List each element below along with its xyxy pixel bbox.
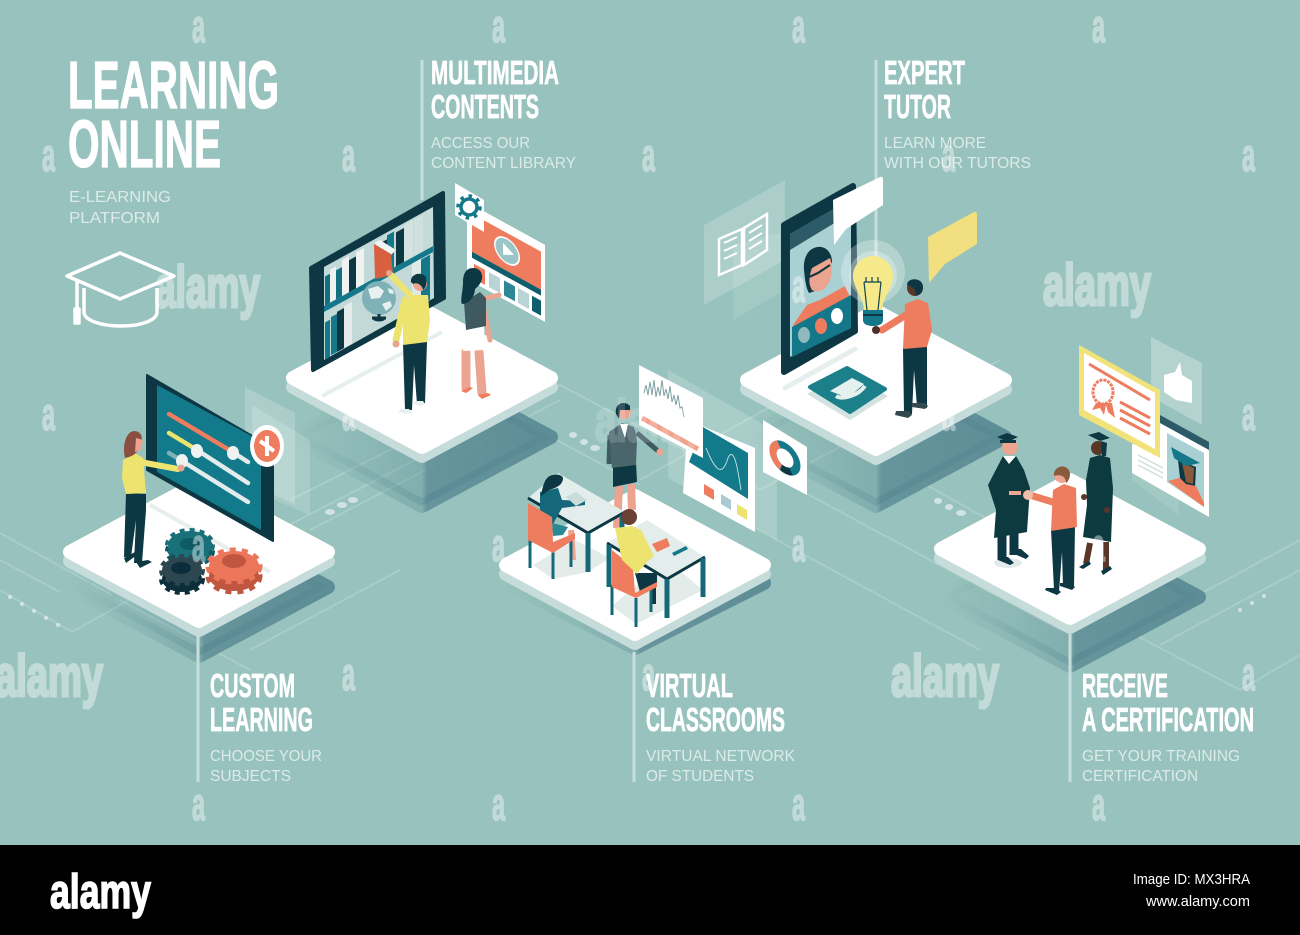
- heading: multimedia contents: CONTENTS: [431, 88, 539, 125]
- heading: virtual classrooms: [646, 667, 785, 738]
- watermark: repeated small letters: a: [942, 129, 955, 181]
- tutor button with cap: [807, 368, 888, 420]
- watermark: repeated small letters: a: [192, 0, 205, 52]
- watermark: repeated small letters: a: [342, 388, 355, 440]
- vertical connector lines: [198, 60, 1070, 782]
- watermark: faint central wordmark: alamy: [595, 389, 703, 454]
- certificate: [1079, 345, 1160, 458]
- chart card with teal graph: [683, 420, 755, 532]
- watermark: repeated small letters: a: [192, 519, 205, 571]
- text: access our content library: ACCESS OUR: [431, 135, 530, 152]
- text: get your training certification: [1082, 748, 1240, 785]
- footer bar: [0, 845, 1300, 935]
- plus badge: [250, 425, 284, 467]
- panel: receive a certification: [941, 337, 1254, 785]
- subtitle: [69, 189, 171, 227]
- text: learn more with our tutors: WITH OUR TUTORS: [884, 155, 1031, 172]
- text: choose your subjects: CHOOSE YOUR: [210, 748, 322, 765]
- woman at monitor: [122, 431, 184, 568]
- text: choose your subjects: SUBJECTS: [210, 768, 291, 785]
- white speech bubble: [833, 177, 883, 245]
- watermark: repeated small letters: a: [642, 129, 655, 181]
- text: learn more with our tutors: [884, 135, 1031, 172]
- watermark: repeated small letters: a: [792, 519, 805, 571]
- text: virtual network of students: VIRTUAL NETWORK: [646, 748, 795, 765]
- icon: graduation cap: [67, 253, 174, 326]
- watermark: alamy wordmarks: alamy: [1043, 253, 1151, 318]
- heading: custom learning: LEARNING: [210, 701, 313, 738]
- watermark: repeated small letters: a: [642, 648, 655, 700]
- desk one with student: [528, 473, 625, 579]
- heading: receive a certification: [1082, 667, 1254, 738]
- circuit background lines: [0, 345, 1300, 690]
- platform: [70, 483, 328, 630]
- donut card: [763, 420, 807, 495]
- profile card: [1132, 415, 1209, 517]
- alamy logo: alamy: [50, 866, 151, 919]
- heading: multimedia contents: MULTIMEDIA: [431, 54, 559, 91]
- watermark: alamy wordmarks: alamy: [155, 255, 260, 320]
- watermark: repeated small letters: a: [942, 388, 955, 440]
- panel: custom learning: [70, 375, 328, 785]
- settings monitor: [147, 375, 273, 541]
- man in yellow sweater: [386, 270, 430, 414]
- heading: expert tutor: TUTOR: [884, 88, 951, 125]
- woman in grey top: [461, 268, 499, 399]
- watermark: repeated small letters: a: [192, 778, 205, 830]
- red book: [374, 240, 396, 279]
- website: www.alamy.com: [1145, 894, 1250, 910]
- watermark: repeated small letters: a: [792, 0, 805, 52]
- watermark: repeated small letters: a: [492, 778, 505, 830]
- translucent rectangle: [1132, 440, 1180, 515]
- translucent card: [668, 370, 777, 540]
- text: get your training certification: GET YOUR TRAINING: [1082, 748, 1240, 765]
- thumbs up card: [1151, 337, 1202, 425]
- text: learn more with our tutors: LEARN MORE: [884, 135, 986, 152]
- platform: [747, 311, 1005, 458]
- text: access our content library: CONTENT LIBRARY: [431, 155, 576, 172]
- translucent cards and book icon: [704, 180, 785, 320]
- heading: custom learning: CUSTOM: [210, 667, 295, 704]
- graduate man: [988, 433, 1030, 568]
- text: get your training certification: CERTIFICATION: [1082, 768, 1198, 785]
- desk two with student: [607, 509, 705, 627]
- line chart card: [639, 365, 703, 458]
- platform: [506, 496, 764, 643]
- text: virtual network of students: [646, 748, 795, 785]
- icon: globe: [362, 281, 396, 322]
- tutor man in coral sweater: [872, 279, 932, 418]
- heading: custom learning: [210, 667, 313, 738]
- watermark: alamy wordmarks: alamy: [891, 644, 999, 709]
- watermark: repeated small letters: a: [1242, 648, 1255, 700]
- watermark: repeated small letters: a: [792, 260, 805, 312]
- text: choose your subjects: [210, 748, 322, 785]
- panel: expert tutor: [704, 54, 1031, 458]
- watermark: repeated small letters: a: [342, 648, 355, 700]
- platform: [293, 309, 551, 456]
- circuit dots: [8, 432, 1266, 627]
- watermark: repeated small letters: a: [492, 0, 505, 52]
- watermark: repeated small letters: a: [1092, 519, 1105, 571]
- watermark: repeated small letters: a: [792, 778, 805, 830]
- subtitle: E-LEARNING: [69, 189, 171, 206]
- phone with video call: [784, 186, 855, 372]
- platform: [941, 480, 1199, 627]
- title: LEARNING: [68, 48, 279, 123]
- heading: receive a certification: RECEIVE: [1082, 667, 1168, 704]
- watermark: repeated small letters: a: [42, 388, 55, 440]
- watermark: alamy wordmarks: [0, 253, 1151, 709]
- image id: Image ID: MX3HRA: [1133, 872, 1250, 888]
- watermark: repeated small letters: a: [492, 519, 505, 571]
- icon: gear card: [455, 183, 484, 232]
- translucent cards: [245, 387, 310, 515]
- text: access our content library: [431, 135, 576, 172]
- watermark: repeated small letters: a: [42, 129, 55, 181]
- heading: virtual classrooms: VIRTUAL: [646, 667, 733, 704]
- panel: multimedia contents: [293, 54, 576, 456]
- tablet bookshelf: [311, 193, 444, 370]
- gears: [161, 530, 260, 593]
- heading: virtual classrooms: CLASSROOMS: [646, 701, 785, 738]
- man in coral sweater: [1023, 467, 1077, 595]
- title: [68, 48, 279, 182]
- icon: light bulb: [841, 240, 905, 326]
- title: ONLINE: [68, 107, 221, 182]
- watermark: repeated small letters: a: [1092, 0, 1105, 52]
- subtitle: PLATFORM: [69, 210, 160, 227]
- text: virtual network of students: OF STUDENTS: [646, 768, 754, 785]
- watermark: repeated small letters: a: [1242, 388, 1255, 440]
- watermark: repeated small letters: a: [342, 129, 355, 181]
- watermark: repeated small letters: a: [1242, 129, 1255, 181]
- graduate woman: [1079, 432, 1113, 575]
- panel: virtual classrooms: [506, 365, 807, 785]
- watermark: repeated small letters: a: [1092, 778, 1105, 830]
- heading: expert tutor: [884, 54, 965, 125]
- teacher: [609, 403, 664, 528]
- heading: multimedia contents: [431, 54, 559, 125]
- platform shadows: [70, 368, 1199, 666]
- video panel: [467, 202, 545, 322]
- yellow speech bubble: [928, 212, 977, 283]
- heading: expert tutor: EXPERT: [884, 54, 965, 91]
